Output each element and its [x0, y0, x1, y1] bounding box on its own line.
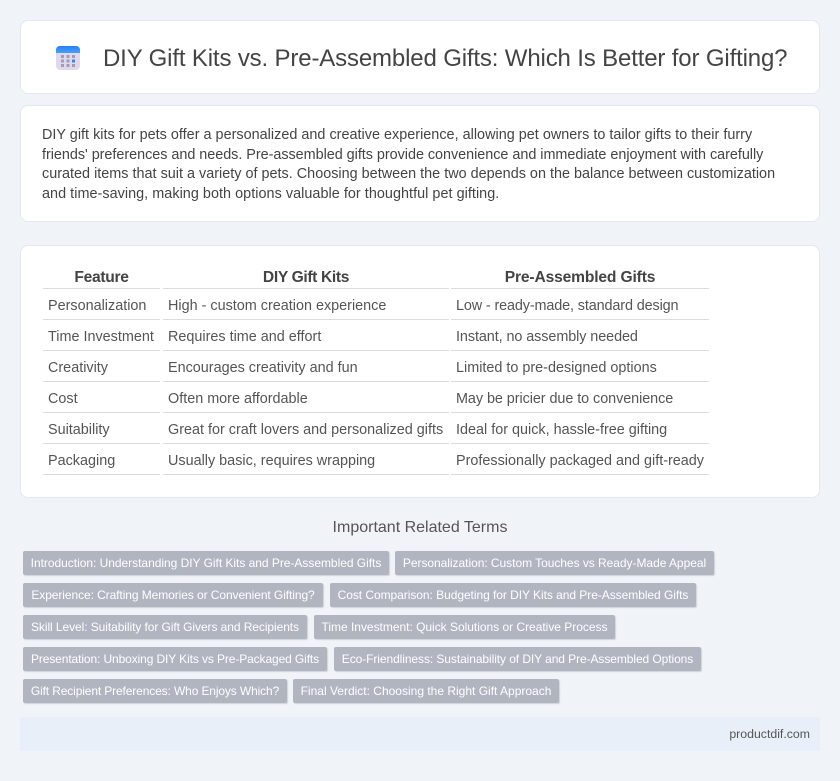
heading: related terms: Important Related Terms	[333, 519, 507, 536]
tag: Cost Comparison: Budgeting for DIY Kits and Pre-Assembled Gifts	[338, 588, 688, 602]
row: Cost	[48, 391, 673, 407]
tag: Introduction: Understanding DIY Gift Kits and Pre-Assembled Gifts	[31, 556, 381, 570]
panel: header	[20, 20, 820, 94]
tag: Presentation: Unboxing DIY Kits vs Pre-Packaged Gifts	[31, 652, 319, 666]
row: Suitability: Suitability	[48, 422, 110, 438]
intro text: curated items that suit a variety of pets. Choosing between the two depends on the balance between customization	[42, 166, 775, 182]
column heading: Pre-Assembled Gifts: Pre-Assembled Gifts	[505, 269, 655, 286]
column heading: Feature: Feature	[74, 269, 129, 286]
row: Packaging	[48, 453, 704, 469]
row: Creativity: Encourages creativity and fun	[168, 360, 358, 376]
row: Time Investment: Time Investment	[48, 329, 154, 345]
tag	[314, 615, 615, 639]
panel: introduction	[20, 105, 820, 222]
row: Time Investment	[48, 329, 638, 345]
tag	[23, 615, 307, 639]
tag: Time Investment: Quick Solutions or Creative Process	[322, 620, 607, 634]
tag	[23, 679, 287, 703]
row: Packaging: Usually basic, requires wrapping	[168, 453, 375, 469]
row: Cost: Cost	[48, 391, 78, 407]
row: Personalization: Personalization	[48, 298, 146, 314]
row: Suitability	[48, 422, 667, 438]
row: Time Investment: Instant, no assembly needed	[456, 329, 638, 345]
tag	[293, 679, 559, 703]
tag	[23, 583, 323, 607]
row: Time Investment: Requires time and effort	[168, 329, 321, 345]
row: Packaging: Packaging	[48, 453, 115, 469]
footer	[20, 717, 820, 751]
tag	[23, 647, 327, 671]
intro text: and time-saving, making both options valuable for thoughtful pet gifting.	[42, 186, 499, 202]
tag: Skill Level: Suitability for Gift Givers and Recipients	[31, 620, 299, 634]
tag: Personalization: Custom Touches vs Ready-Made Appeal	[403, 556, 706, 570]
panel: comparison table	[20, 245, 820, 498]
row: Cost: Often more affordable	[168, 391, 308, 407]
row: Personalization: Low - ready-made, standard design	[456, 298, 678, 314]
tags: related terms	[23, 551, 716, 704]
tag	[334, 647, 701, 671]
row: Creativity	[48, 360, 657, 376]
comparison table	[43, 269, 709, 475]
title: DIY Gift Kits vs. Pre-Assembled Gifts: Which Is Better for Gifting?	[103, 45, 787, 72]
row: Creativity: Creativity	[48, 360, 108, 376]
row: Personalization	[48, 298, 678, 314]
row: Cost: May be pricier due to convenience	[456, 391, 673, 407]
tag	[23, 551, 389, 575]
icon: calendar	[56, 46, 80, 70]
tag	[330, 583, 696, 607]
intro text: friends' preferences and needs. Pre-assembled gifts provide convenience and immediate enjoyment with carefully	[42, 146, 763, 162]
row: Creativity: Limited to pre-designed options	[456, 360, 657, 376]
row: Packaging: Professionally packaged and gift-ready	[456, 453, 704, 469]
tag: Eco-Friendliness: Sustainability of DIY and Pre-Assembled Options	[342, 652, 693, 666]
row: Suitability: Ideal for quick, hassle-free gifting	[456, 422, 667, 438]
intro text	[42, 127, 775, 202]
tag: Gift Recipient Preferences: Who Enjoys Which?	[31, 684, 279, 698]
column heading: DIY Gift Kits: DIY Gift Kits	[263, 269, 349, 286]
tag: Experience: Crafting Memories or Convenient Gifting?	[31, 588, 315, 602]
tag	[395, 551, 714, 575]
row: Personalization: High - custom creation experience	[168, 298, 386, 314]
tag: Final Verdict: Choosing the Right Gift Approach	[301, 684, 551, 698]
footer source text: productdif.com	[729, 727, 810, 741]
intro text: DIY gift kits for pets offer a personalized and creative experience, allowing pet owners to tailor gifts to their furry	[42, 127, 752, 143]
row: Suitability: Great for craft lovers and personalized gifts	[168, 422, 443, 438]
